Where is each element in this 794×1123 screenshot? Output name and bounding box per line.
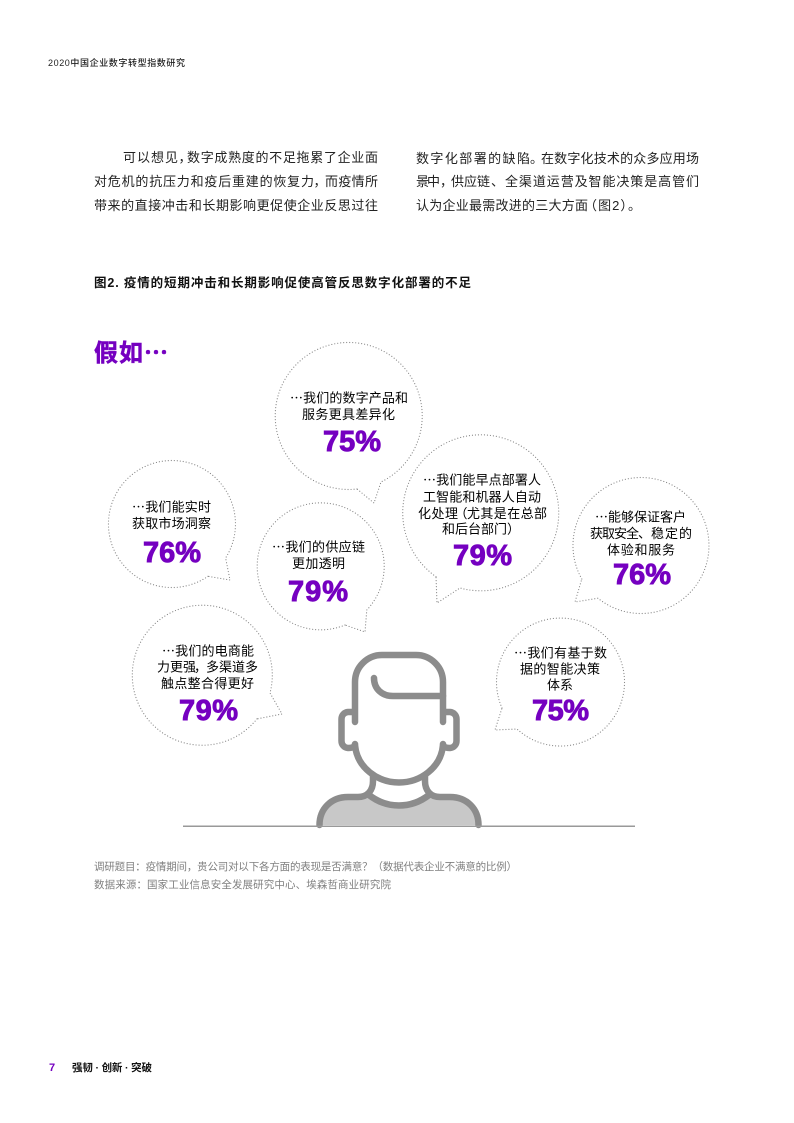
bubble: differentiated digital products: 75% [323, 426, 381, 458]
icon: person illustration [320, 655, 478, 825]
bubble: safe and stable customer experience: 76% [613, 559, 671, 591]
intro text: left column: ， [178, 150, 192, 165]
survey question and data source notes: 调研题目：疫情期间，贵公司对以下各方面的表现是否满意？（数据代表企业不满意的比例） [94, 860, 517, 873]
intro text: right column [416, 151, 699, 213]
intro text: right column: 、 [491, 174, 504, 189]
bubble: real-time market insight: …我们能实时 [132, 496, 211, 516]
bubble: supply chain transparency: 79% [288, 576, 348, 608]
bubble: AI and robotic automation: …我们能早点部署人 [423, 470, 541, 488]
bubble: safe and stable customer experience: …能够保证客户 [595, 506, 686, 526]
bubble: e-commerce and omnichannel [132, 605, 282, 745]
intro text: left column: 而疫情所 [325, 174, 378, 189]
intro text: right column: 供应链 [451, 174, 490, 189]
intro text: left column: 对危机的抗压力和疫后重建的恢复力 [94, 174, 314, 189]
figure title: 图2. 疫情的短期冲击和长期影响促使高管反思数字化部署的不足 [94, 275, 471, 290]
bubble: safe and stable customer experience: 、 [638, 526, 651, 541]
bubble: real-time market insight: 获取市场洞察 [132, 516, 211, 531]
intro text: right column: 。 [530, 151, 543, 166]
intro text: left column [94, 150, 378, 213]
intro text: right column: 景中 [416, 174, 440, 189]
bubble: safe and stable customer experience: 体验和服务 [607, 542, 675, 558]
bubble: supply chain transparency: 更加透明 [292, 556, 345, 571]
bubble: safe and stable customer experience: 获取安全 [590, 526, 639, 541]
bubble: AI and robotic automation: 化处理 [418, 506, 458, 521]
intro text: right column: （图2）。 [584, 198, 641, 213]
intro text: left column: 可以想见 [123, 150, 178, 165]
bubble: AI and robotic automation: 尤其是在总部 [467, 506, 547, 521]
intro text: right column: ， [440, 174, 453, 189]
bubble: AI and robotic automation: 工智能和机器人自动 [423, 490, 541, 504]
bubble: data-driven intelligent decisions: …我们有基于数 [514, 642, 607, 662]
intro text: right column: 认为企业最需改进的三大方面 [416, 198, 588, 213]
footer title: 强韧 · 创新 · 突破 [72, 1061, 152, 1074]
intro text: right column: 在数字化技术的众多应用场 [541, 151, 699, 166]
bubble: safe and stable customer experience [573, 478, 709, 614]
survey question and data source notes [94, 860, 517, 891]
bubble: safe and stable customer experience: 稳定的 [651, 526, 692, 541]
bubble: e-commerce and omnichannel: 多渠道多 [206, 660, 258, 674]
intro text: left column: 数字成熟度的不足拖累了企业面 [187, 150, 378, 165]
intro text: right column: 全渠道运营及智能决策是高管们 [505, 174, 699, 189]
bubble: e-commerce and omnichannel: ， [194, 660, 207, 674]
page header: 2020中国企业数字转型指数研究 [48, 57, 185, 68]
bubble: AI and robotic automation [403, 435, 559, 603]
bubble: AI and robotic automation: 79% [453, 540, 512, 572]
ground line [183, 826, 635, 827]
bubble: data-driven intelligent decisions: 体系 [547, 678, 573, 692]
survey question and data source notes: 数据来源：国家工业信息安全发展研究中心、埃森哲商业研究院 [94, 878, 392, 891]
heading: what if: 假如… [94, 333, 168, 368]
bubble: differentiated digital products: …我们的数字产品和 [290, 388, 408, 406]
bubble: e-commerce and omnichannel: 力更强 [157, 660, 196, 674]
bubble: differentiated digital products: 服务更具差异化 [302, 407, 395, 422]
bubble: real-time market insight: 76% [143, 537, 201, 569]
bubble: e-commerce and omnichannel: …我们的电商能 [162, 640, 254, 660]
intro text: left column: ， [314, 174, 327, 189]
bubble: real-time market insight [108, 461, 235, 588]
bubble: data-driven intelligent decisions: 据的智能决策 [520, 662, 600, 676]
bubble: data-driven intelligent decisions [495, 618, 625, 746]
bubble: e-commerce and omnichannel: 79% [179, 695, 238, 727]
bubble: data-driven intelligent decisions: 75% [532, 695, 589, 727]
bubble: supply chain transparency: …我们的供应链 [272, 536, 365, 556]
intro text: left column: 带来的直接冲击和长期影响更促使企业反思过往 [94, 198, 378, 213]
page number: 7 [49, 1062, 55, 1074]
bubble: AI and robotic automation: （ [454, 506, 468, 521]
intro text: right column: 数字化部署的缺陷 [416, 151, 530, 166]
bubble: supply chain transparency [257, 503, 384, 632]
bubble: e-commerce and omnichannel: 触点整合得更好 [161, 676, 254, 691]
bubble: differentiated digital products [275, 342, 422, 503]
bubble: AI and robotic automation: 和后台部门） [442, 522, 520, 536]
